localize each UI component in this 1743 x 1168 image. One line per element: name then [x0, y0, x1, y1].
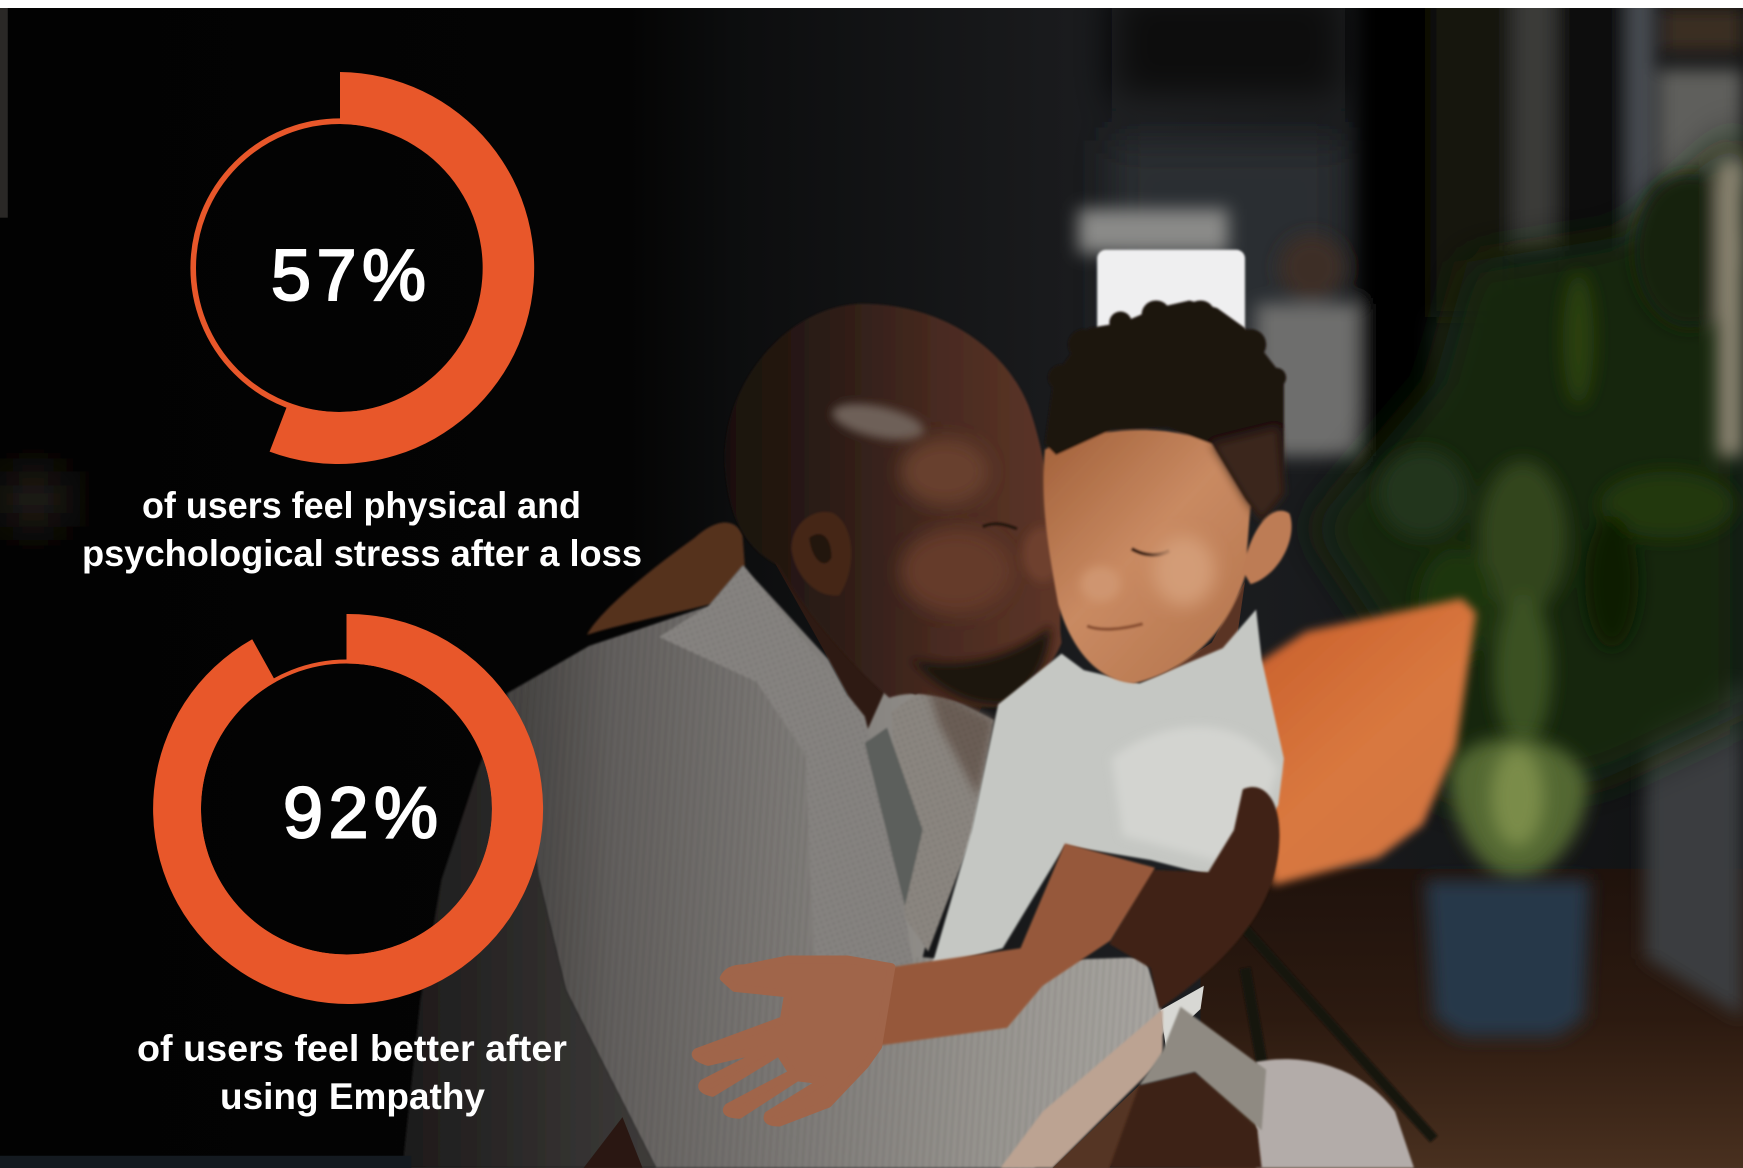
ear [1243, 511, 1292, 584]
value: 57% [271, 236, 426, 316]
nose [1023, 527, 1063, 582]
blurred hallway [1112, 0, 1345, 361]
caption: 92%: using Empathy [220, 1076, 485, 1117]
lower body shadow [584, 1117, 643, 1168]
beard [912, 626, 1050, 706]
plant pot [1425, 880, 1590, 1037]
bright window [1097, 250, 1245, 343]
shirt highlights [1112, 727, 1278, 869]
child's arm [867, 843, 1155, 1046]
caption: 57%: of users feel physical and [142, 485, 581, 526]
top white strip [0, 0, 1743, 8]
cardigan hem [1139, 1007, 1266, 1130]
bottom photo edge [0, 1156, 411, 1168]
child's shirt [932, 609, 1284, 967]
blurred columns and wall [1078, 0, 1743, 472]
cheek light [1153, 536, 1215, 606]
dark lower back of cardigan [402, 693, 656, 1168]
floor [1201, 869, 1743, 1168]
nose [1080, 566, 1120, 602]
caption: 57% [82, 485, 642, 574]
thin ring [193, 121, 487, 415]
grey undershirt [865, 728, 923, 906]
cheek [900, 529, 1012, 613]
child's hand [696, 959, 892, 1123]
blurred plant [1312, 129, 1743, 803]
wedge of skin below cuff [1053, 1085, 1156, 1168]
thin ring [199, 662, 494, 956]
father's sleeve cuff [1000, 1009, 1163, 1168]
right wall [1645, 681, 1743, 1018]
light green leaves at plant base [1450, 738, 1588, 880]
right collar [892, 686, 994, 952]
child's neck [1145, 582, 1245, 687]
thick arc [153, 614, 543, 1004]
ear [791, 512, 851, 595]
child's hand on father's shoulder [587, 523, 745, 635]
cardigan collar [659, 565, 914, 967]
donut chart: 57% [193, 72, 534, 464]
mouth [1087, 624, 1143, 629]
closed eye [1132, 549, 1169, 555]
father's cardigan [507, 565, 1167, 1168]
hair [1045, 300, 1286, 521]
father's neck [767, 549, 1000, 742]
donut chart: 92% [153, 614, 543, 1004]
face [1043, 430, 1251, 683]
chair legs [1243, 926, 1434, 1139]
thick arc [270, 72, 534, 464]
child's head [1043, 300, 1292, 683]
father's hand at child's back [1109, 787, 1279, 1009]
value: 92% [283, 774, 438, 854]
father's trousers [1256, 1059, 1414, 1168]
lower shirt [1161, 986, 1204, 1049]
father's head [725, 304, 1066, 707]
caption: 92%: of users feel better after [137, 1028, 567, 1069]
father's forearm [1109, 1072, 1262, 1168]
hair fade [1212, 427, 1284, 521]
temple highlight [829, 397, 927, 447]
forehead light [900, 438, 989, 505]
orange chair [1251, 598, 1476, 885]
leaf highlight [1491, 747, 1544, 847]
closed eye [983, 524, 1017, 529]
caption: 92% [137, 1028, 567, 1117]
caption: 57%: psychological stress after a loss [82, 533, 642, 574]
